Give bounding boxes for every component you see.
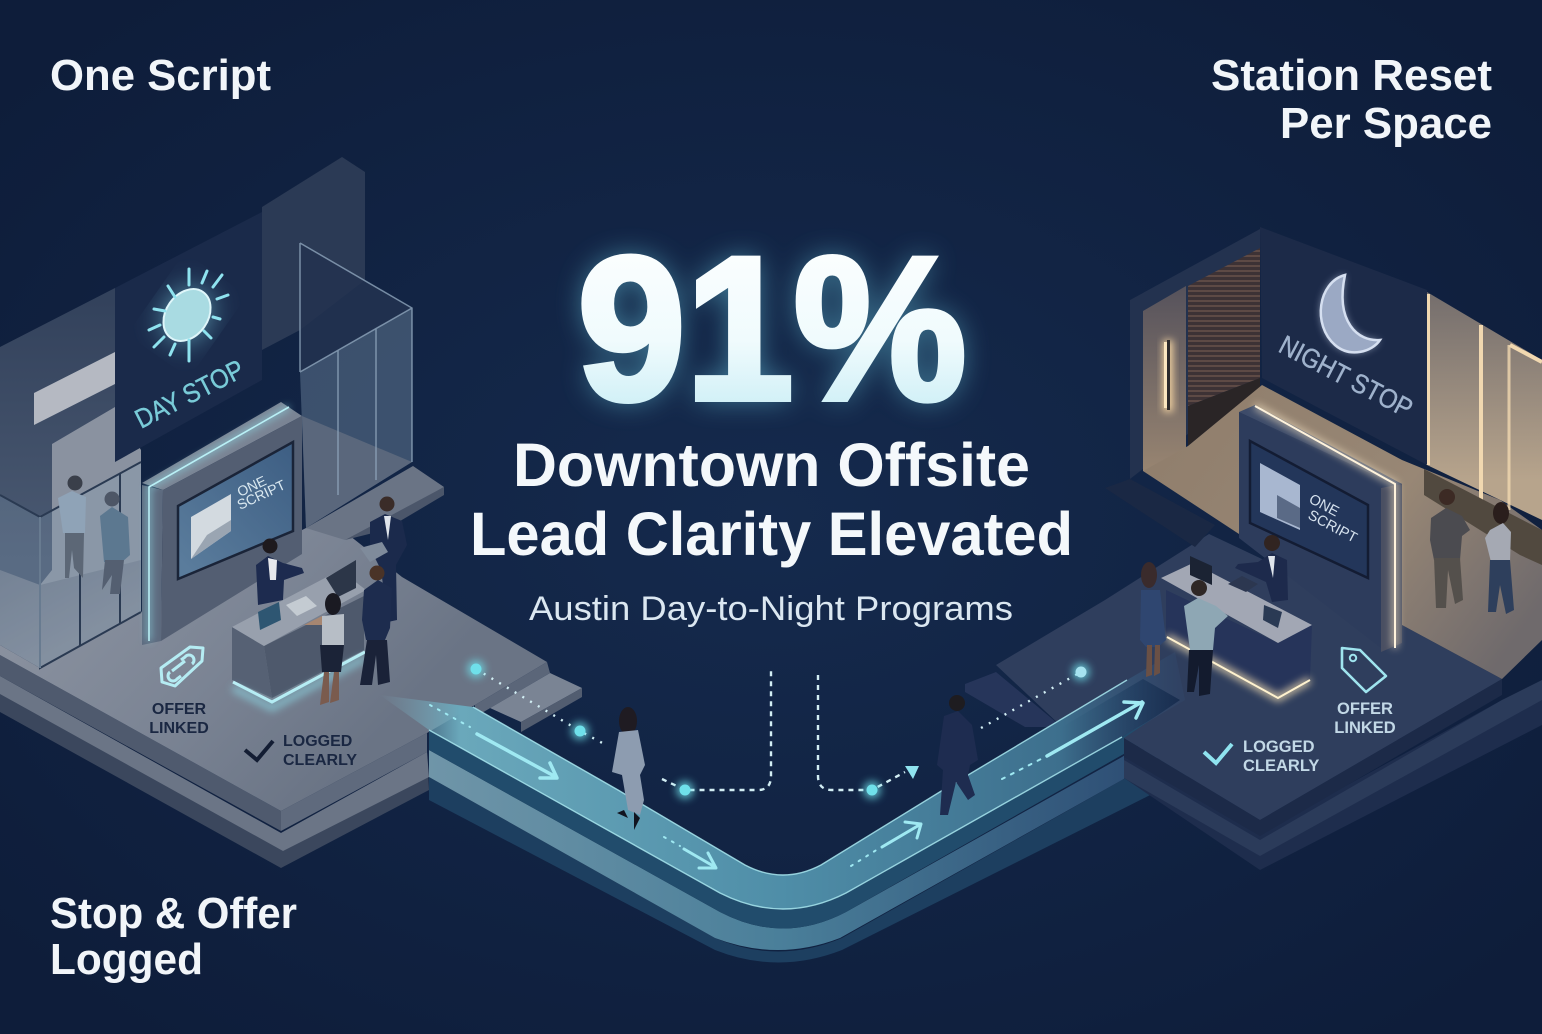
- walkway outer side: [429, 745, 1190, 962]
- person: man with tablet: [360, 496, 407, 622]
- arrow: day small: [684, 849, 716, 868]
- label: logged clearly night: CLEARLY: [1243, 757, 1319, 775]
- subtitle: Austin Day-to-Night Programs: [529, 590, 1013, 628]
- right display wall: [1239, 405, 1402, 652]
- person: woman visitor: [304, 593, 344, 705]
- day stop sign: [115, 212, 262, 462]
- walkway ledge: [429, 722, 1195, 950]
- person: night receptionist: [1235, 535, 1288, 602]
- steps at floor corner: [475, 662, 582, 732]
- dotted connector paths: [476, 669, 1081, 790]
- corner label: stop and offer logged: [50, 889, 297, 984]
- person: woman night: [1140, 562, 1166, 677]
- sign label: DAY STOP: [130, 354, 249, 434]
- left back wall: [0, 288, 141, 668]
- left interior people: [58, 476, 130, 594]
- right night-stop platform: [965, 479, 1542, 870]
- icon: check night: [1204, 744, 1232, 763]
- walkway edge highlights: [429, 680, 1127, 909]
- right staff and visitors: [1140, 489, 1514, 696]
- night stop sign: [1260, 227, 1427, 465]
- corner label: stop and offer logged: Logged: [50, 935, 203, 984]
- person: man visitor: [360, 566, 392, 685]
- label: offer linked day: OFFER: [152, 701, 207, 718]
- label: logged clearly night: LOGGED: [1243, 738, 1315, 756]
- icon: moon: [1321, 275, 1380, 352]
- title: [470, 431, 1073, 568]
- floor surface: [0, 528, 547, 811]
- lower base slab: [0, 676, 429, 868]
- floor side: [1124, 679, 1502, 836]
- label: logged clearly day: [283, 733, 357, 769]
- person: walking woman: [612, 707, 645, 830]
- corner label: stop and offer logged: Stop & Offer: [50, 889, 297, 938]
- wall sconce: [1163, 340, 1173, 412]
- arrow: night large: [1047, 702, 1143, 756]
- icon: sun: [149, 269, 228, 361]
- left room rear tower: [262, 157, 365, 350]
- right warm room: [1130, 229, 1542, 679]
- left front glass wall: [0, 462, 141, 668]
- icon: link tag: [161, 647, 203, 686]
- screen: one script: ONE: [1306, 491, 1342, 520]
- right lower slab: [1124, 680, 1542, 870]
- icon: price tag: [1342, 648, 1386, 692]
- screen: one script: [1250, 441, 1368, 578]
- label: logged clearly day: CLEARLY: [283, 752, 357, 769]
- headline glow: 91%: [578, 215, 966, 443]
- label: offer linked day: [149, 701, 209, 737]
- left day-stop platform: [0, 528, 582, 868]
- corner label: station reset: Station Reset: [1211, 51, 1492, 100]
- arrow: night small: [882, 822, 921, 847]
- person: man in warm room: [1430, 489, 1470, 608]
- label: offer linked night: LINKED: [1334, 719, 1396, 737]
- bench: [1424, 469, 1542, 565]
- left display wall: [142, 402, 302, 645]
- icon: check day: [245, 741, 273, 760]
- person: walking man: [937, 695, 978, 815]
- screen: one script: ONE: [235, 472, 269, 500]
- corner label: station reset: Per Space: [1280, 99, 1492, 148]
- wall light strips: [1428, 294, 1542, 510]
- label: offer linked night: [1334, 700, 1396, 737]
- corner label: one script: One Script: [50, 51, 271, 100]
- label: logged clearly night: [1243, 738, 1319, 775]
- arrow: day large: [477, 734, 557, 778]
- screen: one script: SCRIPT: [235, 476, 288, 513]
- walkway inner side: [429, 702, 1180, 928]
- screen: one script: SCRIPT: [1305, 507, 1360, 547]
- left reception desk: [232, 560, 366, 708]
- steps: [965, 672, 1062, 727]
- upper floor slab side: [0, 655, 281, 831]
- left staff and visitors: [256, 496, 407, 705]
- connector nodes: [467, 660, 1090, 799]
- big stat: 91%: [578, 215, 966, 443]
- person: man night: [1184, 580, 1228, 696]
- label: offer linked night: OFFER: [1337, 700, 1393, 718]
- title: Lead Clarity Elevated: [470, 500, 1073, 568]
- left rear upper right glass room: [300, 243, 444, 540]
- label: logged clearly day: LOGGED: [283, 733, 352, 750]
- person: woman in warm room: [1485, 502, 1514, 614]
- person: receptionist: [256, 538, 304, 605]
- corner label: station reset: [1211, 51, 1492, 148]
- screen: one script: [178, 442, 293, 579]
- walkway surface: [380, 652, 1185, 909]
- floor surface: [996, 534, 1502, 820]
- walkway side layers: [429, 702, 1195, 962]
- walkway arrows: [430, 702, 1143, 868]
- label: offer linked day: LINKED: [149, 720, 209, 737]
- sign label: NIGHT STOP: [1274, 330, 1418, 424]
- title: Downtown Offsite: [513, 431, 1030, 499]
- right reception desk: [1161, 556, 1312, 698]
